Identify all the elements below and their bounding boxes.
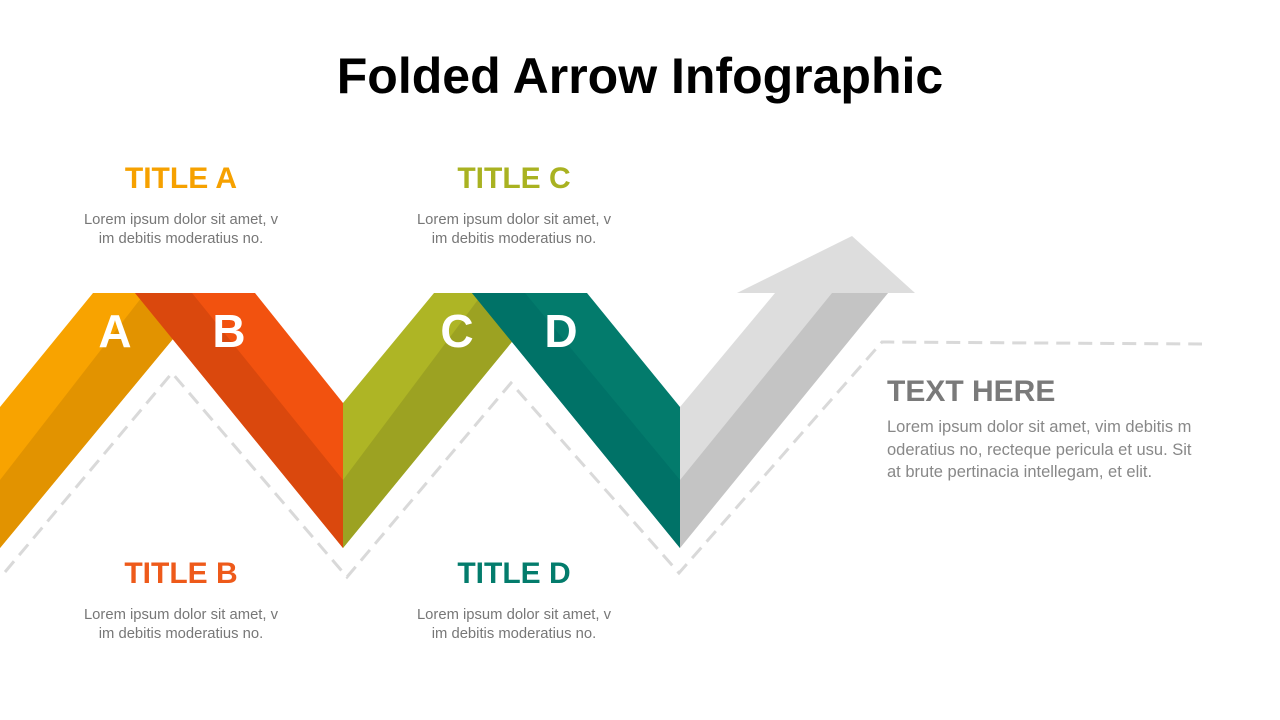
text block: text here: TEXT HERE — [887, 375, 1055, 408]
text block D: im debitis moderatius no. — [432, 626, 596, 642]
text block A: im debitis moderatius no. — [99, 231, 263, 247]
text block C — [417, 162, 612, 247]
text block: text here: Lorem ipsum dolor sit amet, vim debitis m — [887, 418, 1191, 436]
ribbon segment B — [135, 293, 343, 548]
text block A: TITLE A — [125, 162, 237, 195]
arrow — [680, 236, 915, 548]
letter labels: D — [544, 305, 578, 357]
text block A — [84, 162, 279, 247]
dashed guide line — [5, 342, 1202, 577]
text block: text here: oderatius no, recteque pericula et usu. Sit — [887, 441, 1192, 459]
text block B: im debitis moderatius no. — [99, 626, 263, 642]
text block A: Lorem ipsum dolor sit amet, v — [84, 212, 279, 228]
letter labels — [98, 305, 578, 357]
ribbon segment D — [472, 293, 680, 548]
letter labels: A — [98, 305, 132, 357]
text block: text here — [887, 375, 1192, 481]
letter labels: C — [440, 305, 474, 357]
text block D: Lorem ipsum dolor sit amet, v — [417, 607, 612, 623]
ribbon segment C — [343, 293, 552, 548]
text block B: TITLE B — [124, 557, 238, 590]
letter labels: B — [212, 305, 246, 357]
text block C: Lorem ipsum dolor sit amet, v — [417, 212, 612, 228]
text block D: TITLE D — [457, 557, 571, 590]
text block C: im debitis moderatius no. — [432, 231, 596, 247]
title: Folded Arrow Infographic — [337, 48, 943, 104]
text block D — [417, 557, 612, 642]
ribbon segment A — [0, 293, 211, 548]
text block B: Lorem ipsum dolor sit amet, v — [84, 607, 279, 623]
text block B — [84, 557, 279, 642]
text block C: TITLE C — [457, 162, 571, 195]
text block: text here: at brute pertinacia intellegam, et elit. — [887, 463, 1152, 481]
